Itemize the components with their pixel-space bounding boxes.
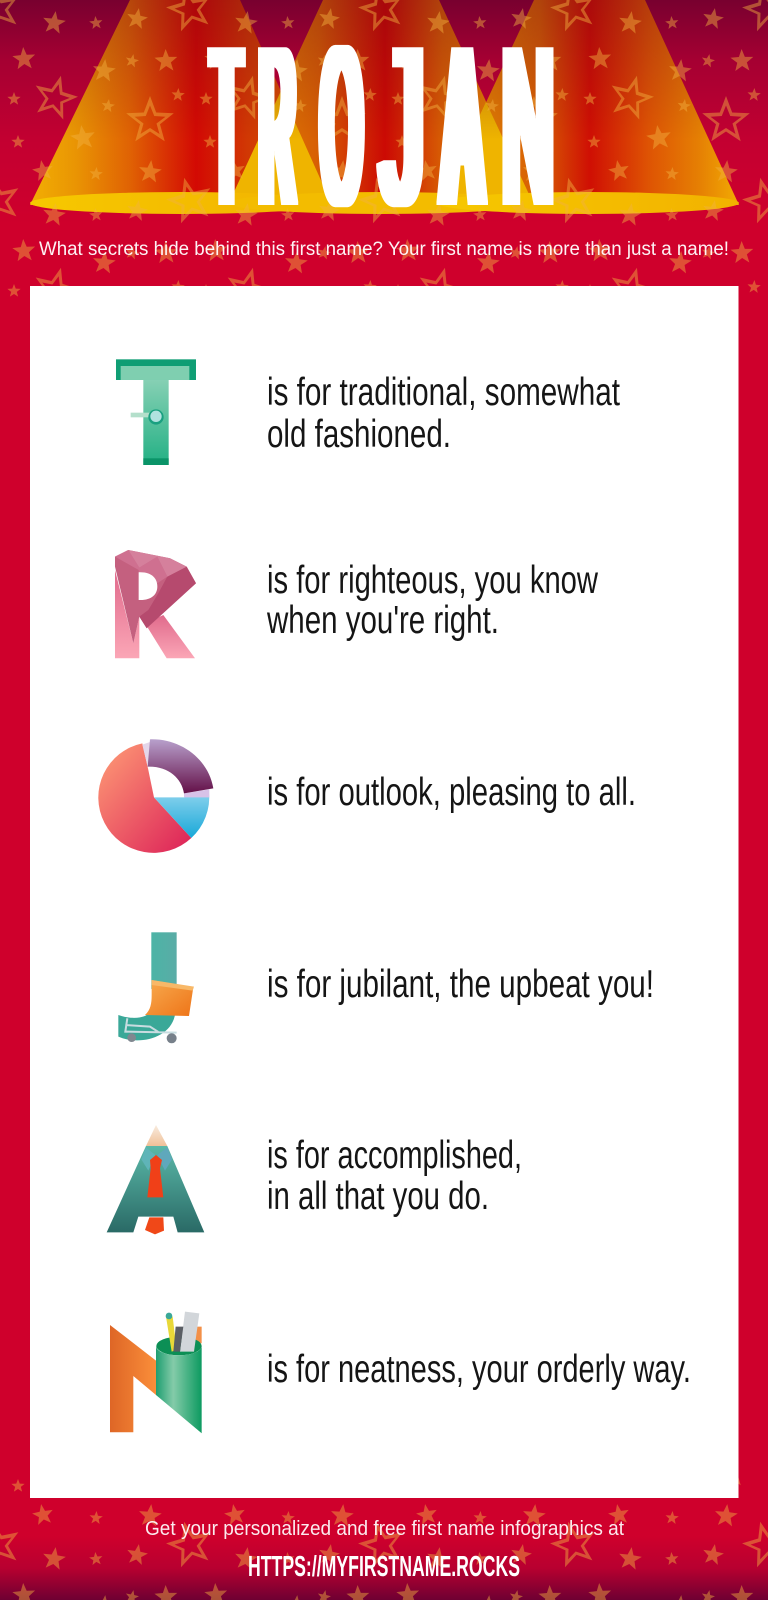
icon: letter O pie chart: [98, 739, 213, 853]
spotlights: [30, 0, 739, 214]
text: R line: is for righteous, you know: [267, 559, 599, 602]
icon: letter R gem: [115, 550, 196, 658]
title: T: [212, 0, 241, 252]
title: O: [322, 0, 361, 252]
icon: letter A necktie: [107, 1125, 204, 1234]
text: T line: old fashioned.: [267, 413, 451, 456]
text: A line: [267, 1134, 522, 1218]
text: J line: is for jubilant, the upbeat you!: [267, 963, 654, 1006]
text: R line: when you're right.: [266, 599, 499, 642]
title: J: [381, 0, 424, 252]
text: R line: [266, 559, 599, 642]
text: T line: is for traditional, somewhat: [267, 371, 620, 414]
title: R: [260, 0, 294, 252]
title: [212, 0, 553, 252]
text: T line: [267, 371, 620, 456]
footer call to action: Get your personalized and free first name infographics at: [145, 1517, 624, 1540]
text: A line: is for accomplished,: [267, 1134, 522, 1177]
star pattern: footer: [0, 1470, 768, 1600]
white content panel: [30, 286, 738, 1498]
icon: letter J cart: [118, 932, 194, 1043]
text: A line: in all that you do.: [267, 1175, 489, 1218]
subtitle: What secrets hide behind this first name? Your first name is more than just a name!: [39, 239, 729, 260]
footer url: HTTPS://MYFIRSTNAME.ROCKS: [248, 1551, 520, 1583]
icon: letter T door: [116, 359, 196, 465]
title: A: [441, 0, 484, 252]
text: O line: is for outlook, pleasing to all.: [267, 771, 636, 814]
star pattern: header: [0, 0, 768, 299]
icon: letter N pencil cup: [110, 1312, 202, 1433]
infographic canvas: N: [503, 0, 553, 252]
